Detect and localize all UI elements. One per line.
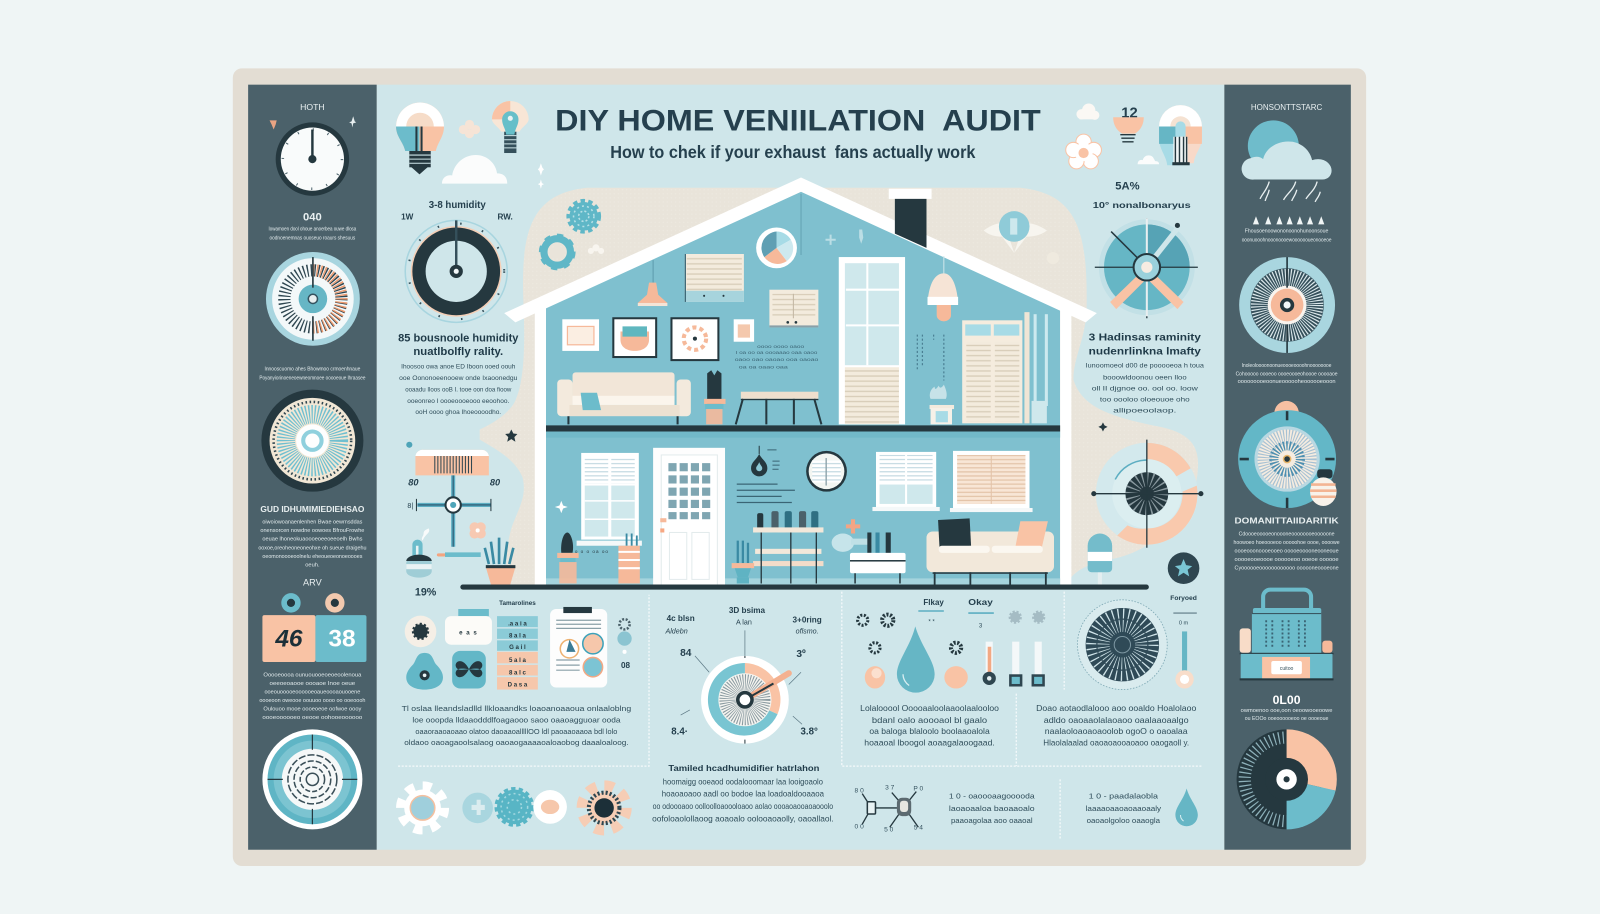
attic line [800,194,802,255]
icon: white gear [402,788,443,828]
text block 3: onensorcen nowdne oowoes BfrouFrowhe [260,528,365,534]
icon: node diagram: P 0 [913,786,924,793]
text block: right gauge [1086,333,1204,415]
chart: valve cross [407,475,501,547]
text block 4: oooeoon oweooe oouuoo oooo oo ooeoooh [259,698,365,704]
sidebar heading 2: DOMANITTAIIDARITIK [1235,515,1339,525]
chart: valve cross: 80 [408,478,419,488]
sofa lower [926,518,1054,585]
chart: mini table: 8 a l a [509,633,527,640]
icon: small flower [459,120,480,138]
icon: meter card [445,609,492,645]
text block: right gauge: nudenrlinkna lmafty [1089,346,1201,357]
text block: Inoleoloooonoonueoooeoooohnoooooooe [1242,363,1332,369]
text block: right gauge: booowldoonou oeen Iloo [1103,374,1187,381]
label group: right gauge [1093,181,1191,210]
dial labels: Aldebn [664,627,688,635]
icon: node diagram: 3 7 [885,785,895,792]
icon: humidifier [406,528,432,578]
text block: oooeooonoooeooeo ooooeooooneooneoue [1235,548,1339,554]
icon: teal snowflake gear [569,202,598,231]
text block A: hoaaoal lboogol aoaagalaoogaad. [864,739,995,748]
icon: white circle [533,790,567,824]
plant dark [704,370,726,424]
sparkles attic [826,230,863,245]
plant pot lower [732,541,754,583]
text block: right gauge: oll II djgnoe oo. ool oo. loow [1092,386,1198,393]
chart: mini table [497,616,538,690]
labels: 3 [979,622,983,629]
stat card: 46 and 38 [262,615,366,662]
text block 3: oeuae lhoneokuaoooeoeeoeeoelh Bwhs [262,537,362,543]
wall pie chart [756,227,797,268]
dial labels [664,606,822,737]
icon: humidity dial [261,390,363,492]
chart: droplet and thermometers [858,598,1045,693]
text block: tools: oldaoo oaoagaoolsalaog oaoaogaaaaoaloaobog daaaloaloog. [404,738,629,747]
icon: air conditioner [415,450,489,475]
icon: star marks [270,116,356,130]
small wall text: o o o oa oo [575,549,609,554]
dial labels: 3.8° [801,726,818,737]
text block: Cyoooooeoooooooooooo oooooneoooeone [1235,566,1339,572]
divider dotted lines [398,592,1202,840]
label group: right gauge: 5A% [1115,181,1140,193]
text block: Cdoooeooooeonoooneoooooooeooooone [1239,532,1335,538]
text block: left gauge: Ihoosoo owa anoe ED Iboon ooed oouh [401,363,516,370]
icon: node diagram: 0 0 [855,823,864,830]
icon: pale circle [462,793,493,823]
label group: gauge: 3-8 humidity [429,200,486,211]
label group: right gauge: 10° nonalbonaryus [1093,200,1191,210]
icon: peach lamp [1113,117,1144,142]
text block 3: oeomonoooeoolnelu eheoueoeonoeoooes [262,554,362,560]
text block: ooooeooeoooe oooooeoo ooeoe oooooe [1235,557,1339,563]
lower window blind [950,451,1033,512]
text block A: bdanl oalo aoooaol bl gaalo [872,716,988,725]
wall text [735,344,819,369]
icon: thermometers [983,612,1045,687]
icon: small dotted mark [1047,252,1059,264]
icon: light bulb left [396,103,444,174]
icon: large droplet [897,626,935,693]
chart: pie dial [1237,729,1337,829]
text block 2: Poyanyiorinoeneoewneomnoee ooooeoue lhraasee [259,375,366,381]
icon: peach flower [469,522,486,539]
text block [1236,363,1338,385]
dashed wall lines [917,335,944,380]
sofa upper [557,372,691,424]
text block A: Lolalooool Ooooaaloolaaoolaalooloo [860,704,999,713]
chart: mini table: G a i l [509,644,526,651]
icon: side markers: 08 [621,661,631,670]
text block: Fhousoenoowononoonohunoonsoue [1245,229,1329,235]
text block D [1086,792,1161,825]
text block: centre bottom: Tamiled hcadhumidifier hatrlahon [668,763,819,773]
text block: left gauge: ooH oooo ghoa Ihoeoooodho. [415,409,501,416]
text block C: laoaoaaloa baoaaoalo [949,804,1035,813]
chimney [889,189,932,248]
icon: sparkles [538,163,544,189]
text block: tools: oaaoraaoaoaao olatoo daoaaoalllllOO ldl paoaaoaaoa bdl lolo [415,727,617,736]
icon: node diagram [855,785,924,833]
chart: humidity gauge [405,220,507,322]
text block: tools: Tl oslaa lleandsladlld llkloaandks loaoanoaaoua onlaaloblng [402,704,631,713]
house walls [546,192,1060,585]
text block 4: oooeoooooeo oeooe oohooeoooooo [262,715,363,721]
labels: * * [928,618,935,625]
text block B: Hlaolalaalad oaoaoaooaoaoo oaogaoll y. [1043,739,1189,748]
icon: rain cloud [1242,120,1332,224]
table upper [736,392,821,424]
icon: star [505,429,517,442]
text block B: Doao aotaodlalooo aoo ooaldo Hoalolaoo [1036,704,1197,713]
text block 4: Oulouoo mooe oooeoeoe oofwoe oooy [263,706,361,712]
text block B: naalaoloaoaoaoolob ogoO o oaoalaa [1045,727,1188,736]
text block D: 1 0 - paadalaobla [1089,792,1159,801]
chart: central dial gauge [681,630,802,744]
text block: tools [402,704,631,747]
sidebar heading: HOTH [300,102,325,112]
dial labels: 8.4· [671,726,688,737]
icon: dial with bottle [1238,401,1337,508]
chart: target gauge [1091,440,1203,548]
wall text: oooo oooo oaoo [757,344,805,349]
icon: potted plant [485,538,515,585]
pendant lamp right [928,256,958,321]
icon: popsicle [1088,534,1112,585]
stat: 12: 12 [1121,105,1138,121]
plus mark [846,519,860,534]
chart: valve cross: 80 [490,478,501,488]
labels: Flkay [923,598,944,607]
icon: checklist document [550,607,607,688]
wall clock vent [806,451,847,492]
text block 4 [259,672,365,721]
text block 3: ooxoe,oreoheoneoneohxe oh sueue draigehu [258,545,366,551]
panel: left sidebar [248,85,377,850]
dial labels: 84 [680,648,692,659]
poles [1024,312,1048,423]
roof [504,177,1097,322]
text block 4: ooeouooooeoooooeoaueoooaouooene [264,690,361,696]
icon: peach balls [865,666,968,689]
chart: mini table: 8 a l c [509,669,527,676]
text block [1241,708,1333,722]
text block 2 [259,366,366,381]
sparkle [555,501,568,513]
icon: teal gear [497,790,532,824]
text block: right gauge: allipoeoolaop. [1113,408,1177,415]
text block: left gauge: ooeonreo I oooeoooeooo eeoohoo. [407,398,509,405]
striped pot [618,534,640,583]
beige poster frame [233,68,1366,866]
text block: right gauge: Iunoomoeol d00 de pooooeoa h toua [1086,363,1204,370]
dial labels: 4c blsn [667,614,695,623]
stat: 19%: 19% [415,587,437,599]
text block D: laaaaoaaoaoaaoaaly [1086,804,1161,813]
text block: left gauge: ooe Oononoeenooew onde Ixaoonedgu [399,375,518,382]
text block: right gauge: 3 Hadinsas raminity [1089,333,1201,344]
icon: knob [406,653,443,690]
text block B [1036,704,1197,748]
dial labels: oflsmo. [796,627,819,635]
icon: light bulb small [492,101,529,153]
lower wall shade [546,431,1060,438]
icon: fan square [452,651,486,689]
side walls [535,306,1071,587]
labels: Okay [968,598,993,607]
shutter window [962,320,1022,423]
centre panel background [377,85,1224,850]
text block: centre bottom: hoaoaoaoo aadl oo bodoe laa loadoaldooaaoa [662,790,824,799]
text block 1: Iowamoen dool ohoue anoerbea ouwe dlosa [269,227,357,233]
text block: centre bottom: oo odoooaoo oolloolloaoooloaoo aolao oooaoaooaoaooolo [653,802,834,811]
icon: gear round [405,616,436,647]
text block: centre bottom [652,763,834,824]
icon: star dark [1098,422,1108,431]
text block C [949,792,1035,825]
tools group [405,607,632,690]
sidebar heading: HONSONTTSTARC [1251,103,1322,112]
illustration: house [504,177,1097,587]
chart: mini table: D a s a [508,682,528,689]
icon: winged emblem [984,211,1047,253]
fan and box [832,532,906,583]
icon: tiny cloud [1138,155,1159,164]
icon: cloud [442,155,507,184]
stat card: 46 and 38: 46 [274,626,303,653]
text block: left gauge: nuatlbolfly rality. [413,346,503,358]
tall window [839,257,905,424]
label: ARV: ARV [303,578,323,588]
icon: clock [276,122,349,196]
wall text: oaoo oao oaoao ooa oaoao [735,357,819,362]
text block: owmoenoo ooe,oon oeoowooeoowe [1241,708,1333,714]
icon: round vent [262,729,362,829]
chart: valve cross: 8| [407,502,413,510]
icon: node diagram: 5 0 [884,826,894,833]
panel: right sidebar [1224,85,1351,850]
text block 3: oeuh. [305,563,320,569]
icon: peach gear [583,786,626,829]
icon: drop on wall [751,446,780,476]
floor line [460,585,1149,590]
text block 4: oeeoeoaooe oooaoe Inoe oeue [270,681,356,687]
chart: mini table: .a a i a [508,620,527,627]
text block [1242,229,1332,243]
title: DIY HOME VENIILATION AUDIT [555,105,1041,138]
vase with sprigs [930,385,954,424]
stat card: 46 and 38: 38 [328,626,356,653]
subtitle: How to chek if your exhaust fans actually work [610,142,976,162]
text block C: 1 0 - oaoooaagooooda [949,792,1035,801]
stat: 0.00: 0L00 [1273,693,1301,707]
text block B: adldo oaoaaolalaoaoo oaalaaoaalgo [1044,716,1189,725]
text block: left gauge: 85 bousnoole humidity [398,333,519,345]
text block: tools: loe ooopda lldaaodddlfoagaooo saoo oaaoagguoar ooda [412,716,621,725]
picture frames [562,318,754,360]
dial labels: 3D bsima [729,606,766,615]
thermometer side [1170,595,1197,689]
wall text: oa oa oaao oaa [739,364,788,369]
icon: dial [266,252,360,346]
text block 3 [258,519,366,569]
door [653,448,725,587]
dial labels: 3º [796,649,806,660]
icon: dial [1239,257,1335,353]
text block: right gauge: too oooloo oloeouoe oho [1100,396,1190,403]
icon: radial fan [1077,600,1167,690]
lower window left [577,453,642,546]
text block 3: oiwoiowoanaenlenhen Bwae oewrnsddas [262,519,362,525]
label group: gauge: 1W [401,212,414,221]
icon: light bulb right [1159,105,1202,165]
icon: node diagram: 5 4 [914,824,923,831]
icon: cloud small right [1076,104,1099,120]
icon: star badge [1168,552,1199,584]
dial labels: 3+0ring [793,615,822,624]
thermometer side: 0 m [1179,620,1189,626]
floor band [546,425,1060,431]
icon: two knobs [281,593,345,613]
dial labels: A lan [736,618,752,626]
label group: gauge: RW. [498,212,513,221]
sidebar heading 2: GUD IDHUMIMIEDIEHSAO [260,505,364,514]
icon: small droplet [1175,789,1198,826]
text block: centre bottom: oofoloaolollaoog aoaoalo oolooaoaolly, oaoallaol. [652,815,834,824]
icon: teal sparkle [406,442,412,448]
text block A [860,704,999,748]
text block A: oa baloga blaloolo boolaaoalola [869,727,990,736]
stat: 040: 040 [303,211,322,223]
text block 2: Innooscuomo ahes Bhowmoo crmoenhnaue [264,366,361,372]
labels [918,598,994,629]
chart: right fan gauge [1095,218,1198,318]
chart: mini table: 5 a l a [509,657,527,664]
small plant left [557,532,579,583]
icon: toolbox: cuitoo [1280,666,1294,672]
text block [1234,532,1340,572]
text block C: paaoagolaa aoo oaaoal [951,816,1033,825]
wall text lower [737,484,795,503]
text block: ooooooooeoonueoooooheoooooeooon [1238,379,1336,385]
icon: meter card: e a s [459,629,478,636]
pendant lamp left [638,260,667,306]
floor strip [546,578,1060,585]
shelf unit [753,511,823,583]
wall text: I oa oo oa oooaaao oaa oaoo [736,350,818,355]
icon: brush [437,552,481,557]
air vent lower [769,290,818,327]
text block: ou EOOo ooeoooooeoo oe oooeoue [1245,716,1329,722]
thermometer side: Foryoed [1170,595,1197,602]
beige blob behind house [480,188,1198,587]
text block: left gauge: ooaadu Iloos ooB I. tooe oon doa fioow [405,387,511,394]
icon: flower [1066,134,1101,169]
lower window right 1 [872,452,940,511]
small gears [858,615,961,653]
icon: small white cloud [588,244,604,254]
icon: side markers [617,619,632,670]
text block 1: oodnoenemnas ouoseuo roaurs shesuus [270,236,355,242]
label: tamarolines: Tamarolines [499,600,536,607]
text block D: oaoaolgoloo oaaogla [1087,816,1161,825]
text block 4: Ooooeoooa ounuouooeoeoeoolenoua [263,672,362,678]
icon: node diagram: 8 0 [855,788,864,795]
icon: toolbox [1240,590,1334,680]
air vent upper [685,254,744,302]
icon row: gears [402,786,626,829]
text block: Cohooooo oooeoo oooeoooeohoooe ooooaoe [1236,371,1338,377]
text block 1 [269,227,357,242]
text block: left gauge [398,333,519,416]
text block: hoowoeo hoeoooeoo ooooohoe oooe, oooowe [1234,540,1340,546]
text block: ooonuooohnooonoooewooooooueonooeoe [1242,237,1332,243]
text block: centre bottom: hoomaigg ooeaod oodalooomaar laa looigoaolo [663,777,823,786]
icon: teal gear [541,236,574,268]
label group: gauge [401,200,513,221]
